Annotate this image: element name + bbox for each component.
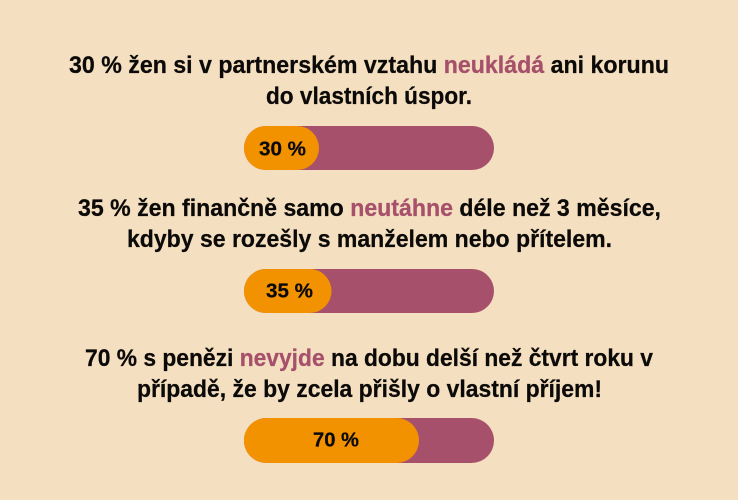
panel: statistic 35 % bbox=[78, 195, 661, 313]
heading: 35 % statement: 35 % žen finančně samo neutáhne déle než 3 měsíce, bbox=[78, 195, 661, 222]
progress bar: 30 %: 30 % bbox=[259, 138, 306, 160]
panel: statistic 70 % bbox=[85, 345, 654, 463]
heading: 70 % statement: 70 % s penězi nevyjde na dobu delší než čtvrt roku v bbox=[85, 345, 654, 372]
progress bar: 70 % bbox=[244, 418, 494, 463]
heading: 35 % statement: kdyby se rozešly s manželem nebo přítelem. bbox=[127, 226, 612, 253]
progress bar: 30 % bbox=[244, 126, 494, 170]
heading: 30 % statement: do vlastních úspor. bbox=[266, 83, 472, 110]
heading: 30 % statement bbox=[69, 52, 669, 110]
panel: statistic 30 % bbox=[69, 52, 669, 170]
heading: 70 % statement bbox=[85, 345, 654, 403]
progress bar: 70 %: 70 % bbox=[313, 428, 359, 452]
heading: 70 % statement: případě, že by zcela přišly o vlastní příjem! bbox=[137, 376, 602, 403]
progress bar: 35 %: 35 % bbox=[266, 280, 313, 302]
heading: 30 % statement: 30 % žen si v partnerském vztahu neukládá ani korunu bbox=[69, 52, 669, 79]
progress bar: 35 % bbox=[244, 269, 494, 313]
heading: 35 % statement bbox=[78, 195, 661, 253]
